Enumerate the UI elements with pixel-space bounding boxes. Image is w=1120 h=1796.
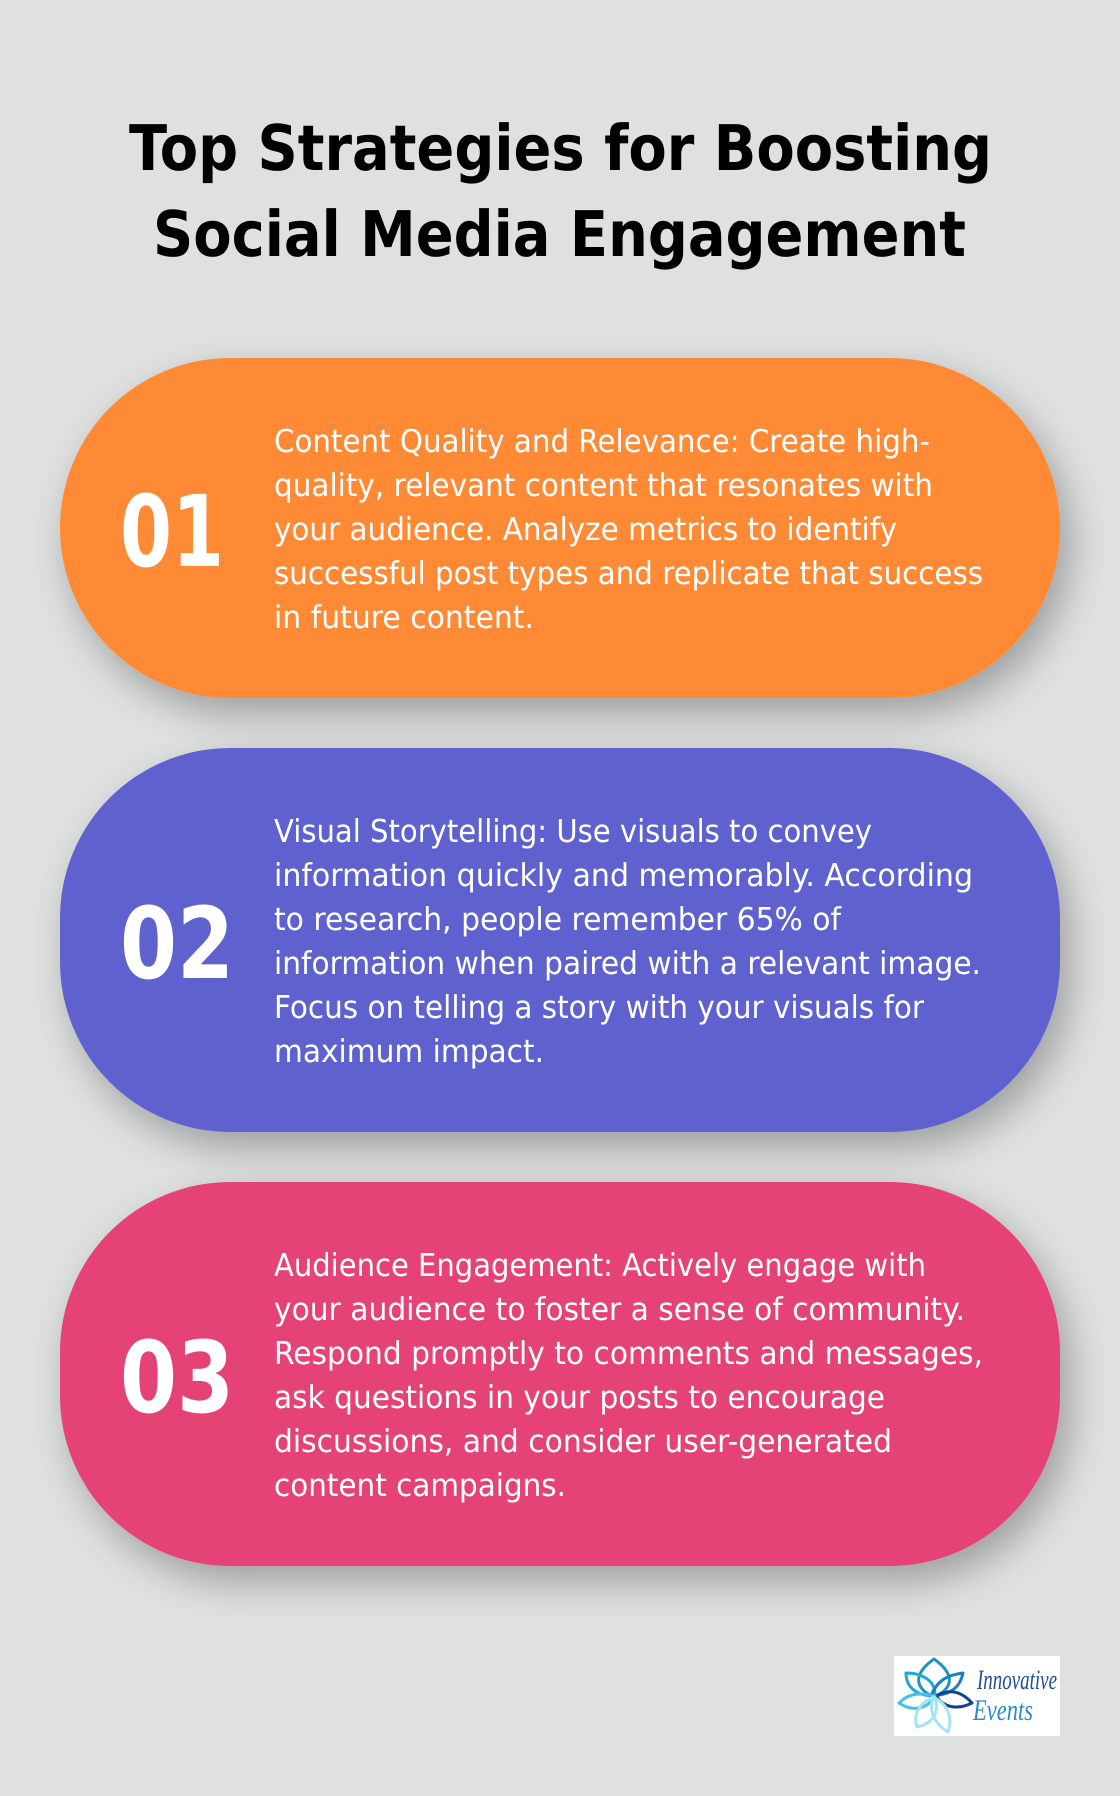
panel: strategy 02 visual storytelling xyxy=(60,748,1060,1132)
icon: flower xyxy=(899,1659,972,1732)
number 02: 02 xyxy=(120,887,234,1002)
text block 02: to research, people remember 65% of xyxy=(274,902,842,938)
panel: strategy 01 content quality xyxy=(60,358,1060,698)
text block 01: your audience. Analyze metrics to identify xyxy=(274,512,897,548)
text block 01: in future content. xyxy=(274,600,534,636)
panel background pink pill xyxy=(60,1182,1060,1566)
logo wordmark: Events xyxy=(972,1694,1033,1727)
panel background blue pill xyxy=(60,748,1060,1132)
text block 03: your audience to foster a sense of community. xyxy=(274,1292,965,1328)
text block 01: successful post types and replicate that success xyxy=(274,556,983,592)
text block 03: discussions, and consider user-generated xyxy=(274,1424,892,1460)
panel background orange pill xyxy=(60,358,1060,698)
text block 01 xyxy=(274,424,983,636)
panel: strategy 03 audience engagement xyxy=(60,1182,1060,1566)
text block 02: information quickly and memorably. According xyxy=(274,858,973,894)
text block 03: content campaigns. xyxy=(274,1468,566,1504)
title: Social Media Engagement xyxy=(153,198,966,271)
title: Top Strategies for Boosting xyxy=(129,112,992,185)
text block 01: Content Quality and Relevance: Create high- xyxy=(274,424,930,460)
number 01: 01 xyxy=(120,475,224,590)
title xyxy=(129,112,992,271)
logo wordmark: Innovative xyxy=(976,1665,1057,1696)
text block 02: maximum impact. xyxy=(274,1034,544,1070)
logo: Innovative Events xyxy=(894,1656,1060,1736)
text block 02: Visual Storytelling: Use visuals to convey xyxy=(274,814,872,850)
text block 03 xyxy=(274,1248,983,1504)
text block 03: Respond promptly to comments and messages, xyxy=(274,1336,983,1372)
text block 02: information when paired with a relevant image. xyxy=(274,946,981,982)
text block 02 xyxy=(274,814,981,1070)
number 03: 03 xyxy=(120,1321,234,1436)
logo wordmark xyxy=(972,1665,1057,1727)
logo white background xyxy=(894,1656,1060,1736)
text block 02: Focus on telling a story with your visuals for xyxy=(274,990,924,1026)
text block 01: quality, relevant content that resonates with xyxy=(274,468,933,504)
text block 03: ask questions in your posts to encourage xyxy=(274,1380,885,1416)
text block 03: Audience Engagement: Actively engage with xyxy=(274,1248,926,1284)
